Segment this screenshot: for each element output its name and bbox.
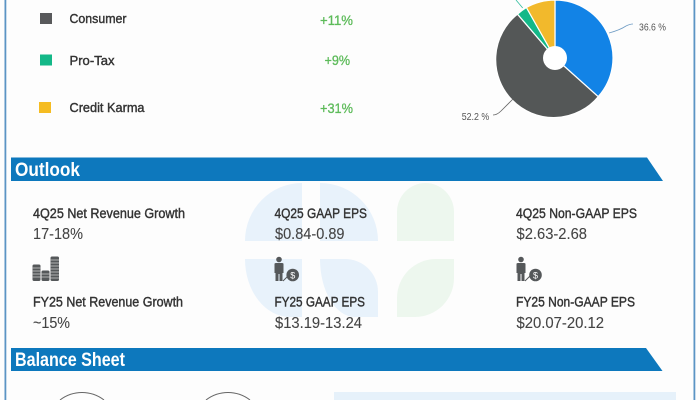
outlook metric: FY25 net revenue growth: ~15% (33, 315, 70, 332)
segment row: Credit Karma (39, 100, 353, 116)
outlook metric: 4Q25 Non-GAAP EPS: 4Q25 Non-GAAP EPS (516, 206, 637, 221)
segment row: Consumer: Consumer (70, 11, 127, 26)
segment row: Pro-Tax (40, 52, 350, 68)
icon: person with dollar coin (Non-GAAP) (516, 257, 542, 281)
pie chart: revenue mix (462, 0, 666, 123)
balance sheet panel (334, 392, 676, 400)
icon: coin stacks (32, 256, 59, 281)
pie chart: revenue mix: 52.2 % (462, 112, 489, 123)
outlook metric: FY25 Non-GAAP EPS: $20.07-20.12 (516, 315, 604, 332)
balance sheet circle: right (206, 392, 250, 400)
outlook metric: 4Q25 GAAP EPS (274, 206, 367, 243)
watermark logo (245, 183, 454, 317)
segment row: Consumer (40, 11, 353, 28)
outlook metric: FY25 net revenue growth: FY25 Net Revenue Growth (33, 294, 183, 310)
panel: segment revenue growth (39, 11, 353, 116)
heading: Outlook (11, 158, 663, 181)
outlook metric: 4Q25 Non-GAAP EPS (516, 206, 637, 243)
pie chart: revenue mix: 36.6 % (639, 22, 666, 34)
segment row: Consumer: +11% (320, 12, 353, 28)
outlook metric: FY25 GAAP EPS (274, 294, 365, 332)
outlook metric: 4Q25 net revenue growth (33, 206, 185, 243)
icon: person with dollar coin (Non-GAAP): $ (533, 270, 538, 280)
icon: person with dollar coin (GAAP) (274, 257, 299, 281)
heading: Balance Sheet (11, 348, 662, 371)
outlook metric: FY25 GAAP EPS: FY25 GAAP EPS (274, 294, 365, 310)
outlook metric: 4Q25 GAAP EPS: 4Q25 GAAP EPS (274, 206, 367, 221)
segment row: Pro-Tax: Pro-Tax (70, 53, 115, 68)
segment row: Pro-Tax: +9% (324, 52, 350, 68)
outlook metric: FY25 net revenue growth (33, 294, 183, 332)
outlook metric: FY25 Non-GAAP EPS: FY25 Non-GAAP EPS (516, 294, 635, 310)
heading: Outlook: Outlook (15, 160, 80, 181)
outlook metric: 4Q25 net revenue growth: 17-18% (33, 226, 83, 243)
balance sheet circle: left (60, 392, 104, 400)
heading: Balance Sheet: Balance Sheet (15, 350, 126, 371)
outlook metric: 4Q25 Non-GAAP EPS: $2.63-2.68 (516, 226, 587, 243)
outlook metric: 4Q25 net revenue growth: 4Q25 Net Revenue Growth (33, 206, 185, 221)
outlook metric: 4Q25 GAAP EPS: $0.84-0.89 (275, 226, 344, 243)
outlook metric: FY25 Non-GAAP EPS (516, 294, 635, 332)
icon: person with dollar coin (GAAP): $ (290, 270, 295, 280)
outlook metric: FY25 GAAP EPS: $13.19-13.24 (275, 315, 362, 332)
segment row: Credit Karma: Credit Karma (70, 100, 145, 115)
segment row: Credit Karma: +31% (320, 100, 353, 116)
